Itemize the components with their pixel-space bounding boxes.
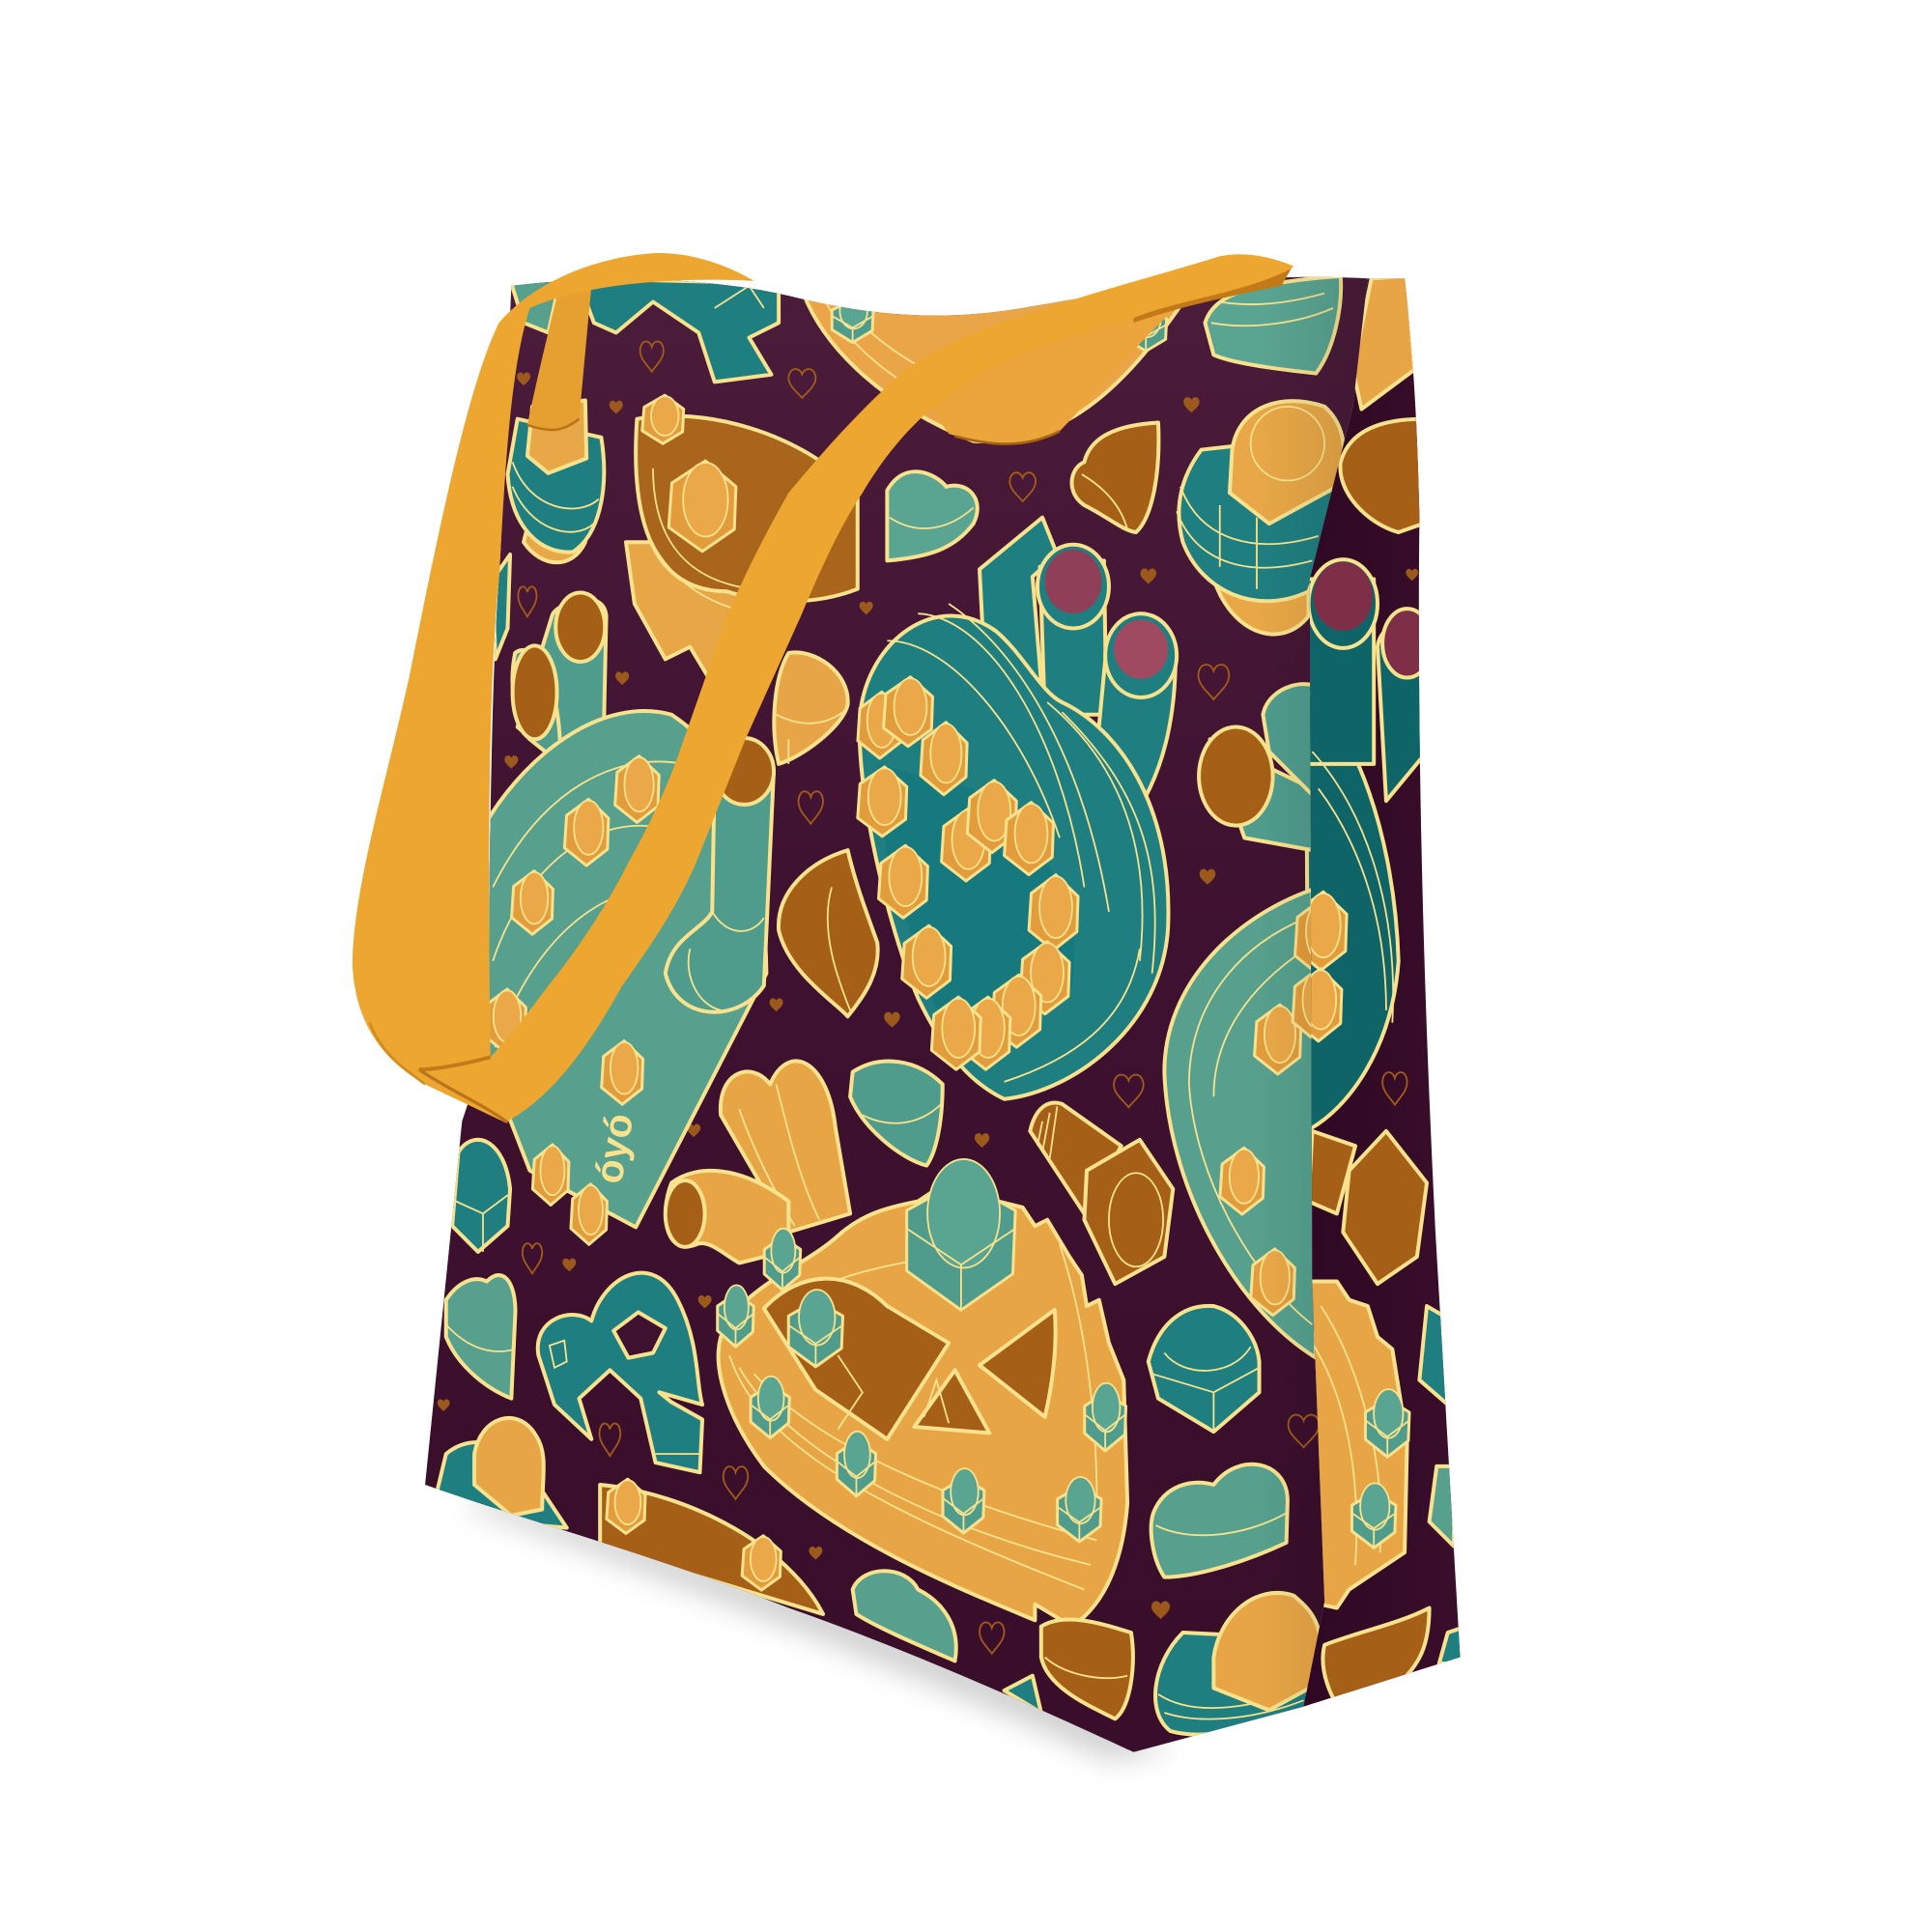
gusset brown heart: [1340, 419, 1423, 532]
dark teal nut center right: [1149, 1306, 1260, 1432]
stacked nut top left: [508, 401, 604, 562]
teal heart top right: [1205, 276, 1341, 373]
wrench lower left: [538, 1273, 702, 1472]
gusset nuts: [1295, 892, 1347, 970]
wrench top teal: [579, 273, 779, 382]
gusset small teal pieces: [1419, 1306, 1448, 1405]
left edge scraps: [493, 554, 510, 659]
top orange gear behind strap: [804, 294, 1189, 441]
teal heart lower left: [446, 1275, 515, 1399]
teal center heart body with pipes: [858, 518, 1177, 1099]
gusset brown heart bottom: [1322, 1608, 1430, 1716]
gusset teal body: [1306, 690, 1399, 1131]
fold shadow: [1289, 278, 1368, 1706]
gusset bolt: [1309, 1131, 1355, 1213]
big orange mechanical heart: [666, 1061, 1127, 1627]
ground shadow: [474, 1493, 1171, 1759]
brown heart top right: [1071, 423, 1158, 532]
handle strap right flap: [912, 296, 1189, 444]
tote handle strap: [353, 253, 1293, 1122]
small teal corner bottom: [1005, 1676, 1041, 1713]
stacked nut bottom right: [1155, 1593, 1321, 1735]
bag front panel: [407, 246, 1399, 1775]
teal heart lower right: [1151, 1464, 1288, 1577]
large light teal right heart: [1162, 682, 1316, 1360]
teal lobe at top left: [511, 282, 556, 334]
stacked nut right: [1177, 401, 1344, 635]
orange nut stack bottom left: [431, 1418, 567, 1528]
logo: óyó: [585, 1110, 641, 1187]
small filled hearts: [438, 372, 1215, 1619]
gusset outline hearts: [1382, 1072, 1407, 1105]
brown heart bottom: [1041, 1620, 1133, 1719]
gusset small hearts: [1406, 569, 1418, 581]
outline hearts: [518, 341, 1319, 1654]
orange heart center left: [774, 652, 848, 764]
dark teal nut lower left: [452, 1140, 510, 1252]
teal heart mid top: [887, 471, 978, 560]
brown heart center: [779, 850, 878, 1016]
bag side gusset: [1304, 278, 1461, 1706]
brown bolt: [1030, 1103, 1173, 1284]
brown gear bottom: [600, 1479, 823, 1614]
gusset orange gear: [1309, 1282, 1407, 1608]
teal heart bottom: [853, 1571, 956, 1661]
gusset maroon pipes: [1310, 557, 1420, 804]
teal small heart center: [850, 1062, 943, 1166]
light teal left heart with pipes: [485, 593, 774, 1244]
tote bag product illustration: [352, 253, 1461, 1770]
gusset orange piece top: [1353, 276, 1414, 409]
handle strap far side flap: [527, 281, 591, 430]
white notch in bag top: [1180, 269, 1222, 286]
brown gear top with nuts: [626, 395, 858, 678]
